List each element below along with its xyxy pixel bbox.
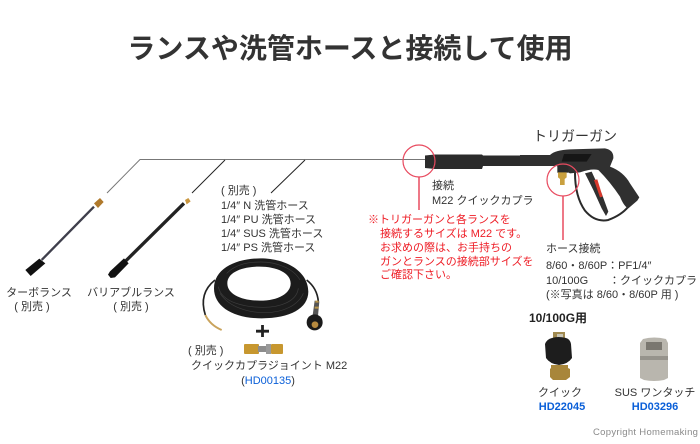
hose list: 1/4″ PS 洗管ホース <box>221 240 315 254</box>
hose list: 1/4″ PU 洗管ホース <box>221 212 316 226</box>
heading: 10/100G: 10/100G用 <box>529 311 587 325</box>
label: hose connection: (※写真は 8/60・8/60P 用 ) <box>546 287 678 301</box>
hose coil <box>203 258 323 330</box>
label: hose connection: 10/100G <box>546 275 588 287</box>
label: lance connection: 接続 <box>432 178 454 192</box>
red note: ガンとランスの接続部サイズを <box>380 254 533 268</box>
label: hose connection: 8/60・8/60P：PF1/4″ <box>546 260 652 272</box>
label: coupler joint: クイックカプラジョイント M22 <box>191 359 347 372</box>
label: coupler joint: (HD00135) <box>241 375 295 387</box>
variable lance <box>108 198 191 278</box>
label: turbo lance: ターボランス <box>6 286 72 299</box>
barrel <box>425 154 525 169</box>
label: hose connection: ：クイックカプラ <box>609 274 697 287</box>
label: turbo lance <box>6 286 72 313</box>
stainless coupler photo <box>640 338 668 381</box>
label: trigger gun: トリガーガン <box>533 128 617 144</box>
label: quick coupler: クイック <box>538 386 582 399</box>
label: stainless coupler: HD03296 <box>632 401 678 413</box>
hose list: 1/4″ SUS 洗管ホース <box>221 226 323 240</box>
quick coupler photo <box>545 332 572 380</box>
label: turbo lance: ( 別売 ) <box>14 300 50 313</box>
hose list <box>221 184 323 254</box>
gun body <box>520 148 639 220</box>
hose list: 1/4″ N 洗管ホース <box>221 198 309 212</box>
title: ランスや洗管ホースと接続して使用 <box>127 33 573 64</box>
label: quick coupler <box>538 386 585 413</box>
label: lance connection: M22 クイックカプラ <box>432 194 533 207</box>
callout circle: hose connection <box>547 164 579 240</box>
callout circle: lance connection <box>403 145 435 210</box>
label: variable lance: ( 別売 ) <box>113 300 149 313</box>
red note: ※トリガーガンと各ランスを <box>368 212 511 226</box>
turbo lance <box>25 198 104 276</box>
red note: 接続するサイズは M22 です。 <box>380 226 527 240</box>
red note: ご確認下さい。 <box>380 267 457 281</box>
red note <box>368 212 533 281</box>
coupler joint photo <box>244 344 283 354</box>
label: stainless coupler: SUS ワンタッチ <box>615 386 695 399</box>
label: variable lance <box>87 285 175 313</box>
label: stainless coupler <box>615 386 695 413</box>
red note: お求めの際は、お手持ちの <box>380 240 512 254</box>
connector lines <box>107 160 425 193</box>
label: hose connection <box>546 241 697 301</box>
label: coupler joint <box>188 344 347 387</box>
label: quick coupler: HD22045 <box>539 401 585 413</box>
label: coupler joint: ( 別売 ) <box>188 344 223 357</box>
label: lance connection <box>432 178 533 207</box>
hose list: ( 別売 ) <box>221 184 256 197</box>
trigger gun <box>425 148 639 220</box>
label: variable lance: バリアブルランス <box>87 285 175 299</box>
plus sign <box>256 325 269 337</box>
label: hose connection: ホース接続 <box>546 241 600 255</box>
copyright: Copyright Homemaking <box>593 427 698 438</box>
